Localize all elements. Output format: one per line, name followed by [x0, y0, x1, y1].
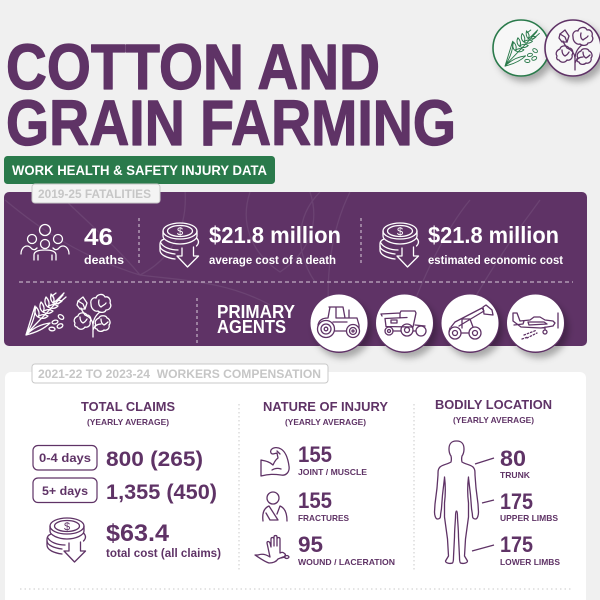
section tab: 2021-22 TO 2023-24 WORKERS COMPENSATION	[38, 367, 321, 381]
icon: wounded hand	[255, 536, 289, 563]
icon: coins with down arrow	[47, 518, 86, 562]
agent: telehandler	[441, 294, 499, 353]
stat: wound / laceration	[298, 532, 395, 567]
column: total claims: TOTAL CLAIMS	[81, 400, 175, 414]
value: total cost: total cost (all claims)	[106, 548, 221, 560]
stat: lower limbs: 175	[500, 532, 533, 557]
icon: cotton	[74, 294, 111, 337]
title: COTTON AND	[6, 31, 380, 103]
agent: harvester	[376, 294, 434, 353]
stat: economic cost	[428, 222, 563, 267]
section tab	[32, 184, 160, 203]
stat: lower limbs	[500, 532, 560, 567]
stat: upper limbs: UPPER LIMBS	[500, 513, 558, 523]
agent: crop duster	[506, 294, 564, 353]
value: 0-4 days: 800 (265)	[106, 448, 203, 471]
heading: primary agents	[217, 302, 295, 337]
icon: human body	[434, 441, 478, 563]
background botanical pattern	[5, 190, 540, 346]
stat: economic cost: $21.8 million	[428, 222, 559, 248]
stat: lower limbs: LOWER LIMBS	[500, 557, 560, 567]
icon: wheat	[26, 293, 66, 335]
stat: economic cost: estimated economic cost	[428, 255, 563, 267]
stat: fractures	[298, 488, 349, 523]
column: bodily location: (YEARLY AVERAGE)	[453, 415, 534, 425]
stat: average cost	[209, 222, 341, 267]
icon: person with sling	[263, 492, 287, 521]
subtitle banner: WORK HEALTH & SAFETY INJURY DATA	[12, 162, 267, 178]
panel: workers compensation	[5, 364, 586, 600]
stat: fractures: 155	[298, 488, 332, 513]
value: total cost: $63.4	[106, 520, 170, 547]
icon: coins with down arrow	[160, 223, 198, 267]
section tab	[32, 364, 328, 383]
value: 5+ days: 1,355 (450)	[106, 481, 217, 504]
icon: wheat badge	[493, 20, 549, 76]
icon: people	[21, 224, 69, 260]
agent: tractor	[310, 294, 368, 353]
column: nature of injury: (YEARLY AVERAGE)	[285, 417, 366, 427]
pointer: trunk	[475, 458, 494, 464]
stat: average cost: average cost of a death	[209, 255, 336, 267]
stat: upper limbs: 175	[500, 489, 533, 514]
heading: primary agents: PRIMARY	[217, 302, 295, 322]
column: total claims	[33, 400, 221, 562]
icon: coins with down arrow: $	[397, 226, 403, 238]
value: total cost	[106, 520, 221, 560]
subtitle banner	[4, 156, 275, 184]
icon: coins with down arrow: $	[64, 521, 70, 533]
column: nature of injury: NATURE OF INJURY	[263, 400, 389, 414]
icon: coins with down arrow: $	[177, 226, 183, 238]
panel: fatalities	[4, 184, 587, 353]
heading: primary agents: AGENTS	[217, 317, 286, 337]
stat: trunk: TRUNK	[500, 470, 531, 480]
stat: joint / muscle: 155	[298, 442, 332, 467]
icon: coins with down arrow	[380, 223, 418, 267]
pill: 0-4 days: 0-4 days	[39, 451, 91, 465]
stat: deaths	[84, 224, 124, 267]
stat: average cost: $21.8 million	[209, 222, 341, 248]
column: bodily location	[434, 398, 560, 567]
stat: deaths: deaths	[84, 253, 124, 267]
section tab: 2019-25 FATALITIES	[38, 187, 151, 201]
column: nature of injury	[255, 400, 395, 567]
stat: fractures: FRACTURES	[298, 513, 349, 523]
pointer: upper limbs	[482, 500, 494, 503]
stat: joint / muscle	[298, 442, 367, 477]
stat: upper limbs	[500, 489, 558, 523]
stat: trunk: 80	[500, 446, 526, 471]
stat: wound / laceration: WOUND / LACERATION	[298, 557, 395, 567]
column: total claims: (YEARLY AVERAGE)	[87, 417, 169, 427]
title: GRAIN FARMING	[6, 87, 456, 159]
column: bodily location: BODILY LOCATION	[435, 398, 552, 412]
pill: 5+ days	[33, 478, 97, 502]
pill: 5+ days: 5+ days	[42, 484, 88, 498]
title	[6, 31, 456, 159]
pointer: lower limbs	[472, 545, 494, 551]
stat: wound / laceration: 95	[298, 532, 323, 557]
icon: flexed arm	[261, 448, 289, 476]
icon: cotton badge	[545, 20, 600, 76]
pill: 0-4 days	[33, 446, 97, 470]
stat: deaths: 46	[84, 224, 113, 251]
stat: trunk	[500, 446, 531, 480]
stat: joint / muscle: JOINT / MUSCLE	[298, 467, 367, 477]
